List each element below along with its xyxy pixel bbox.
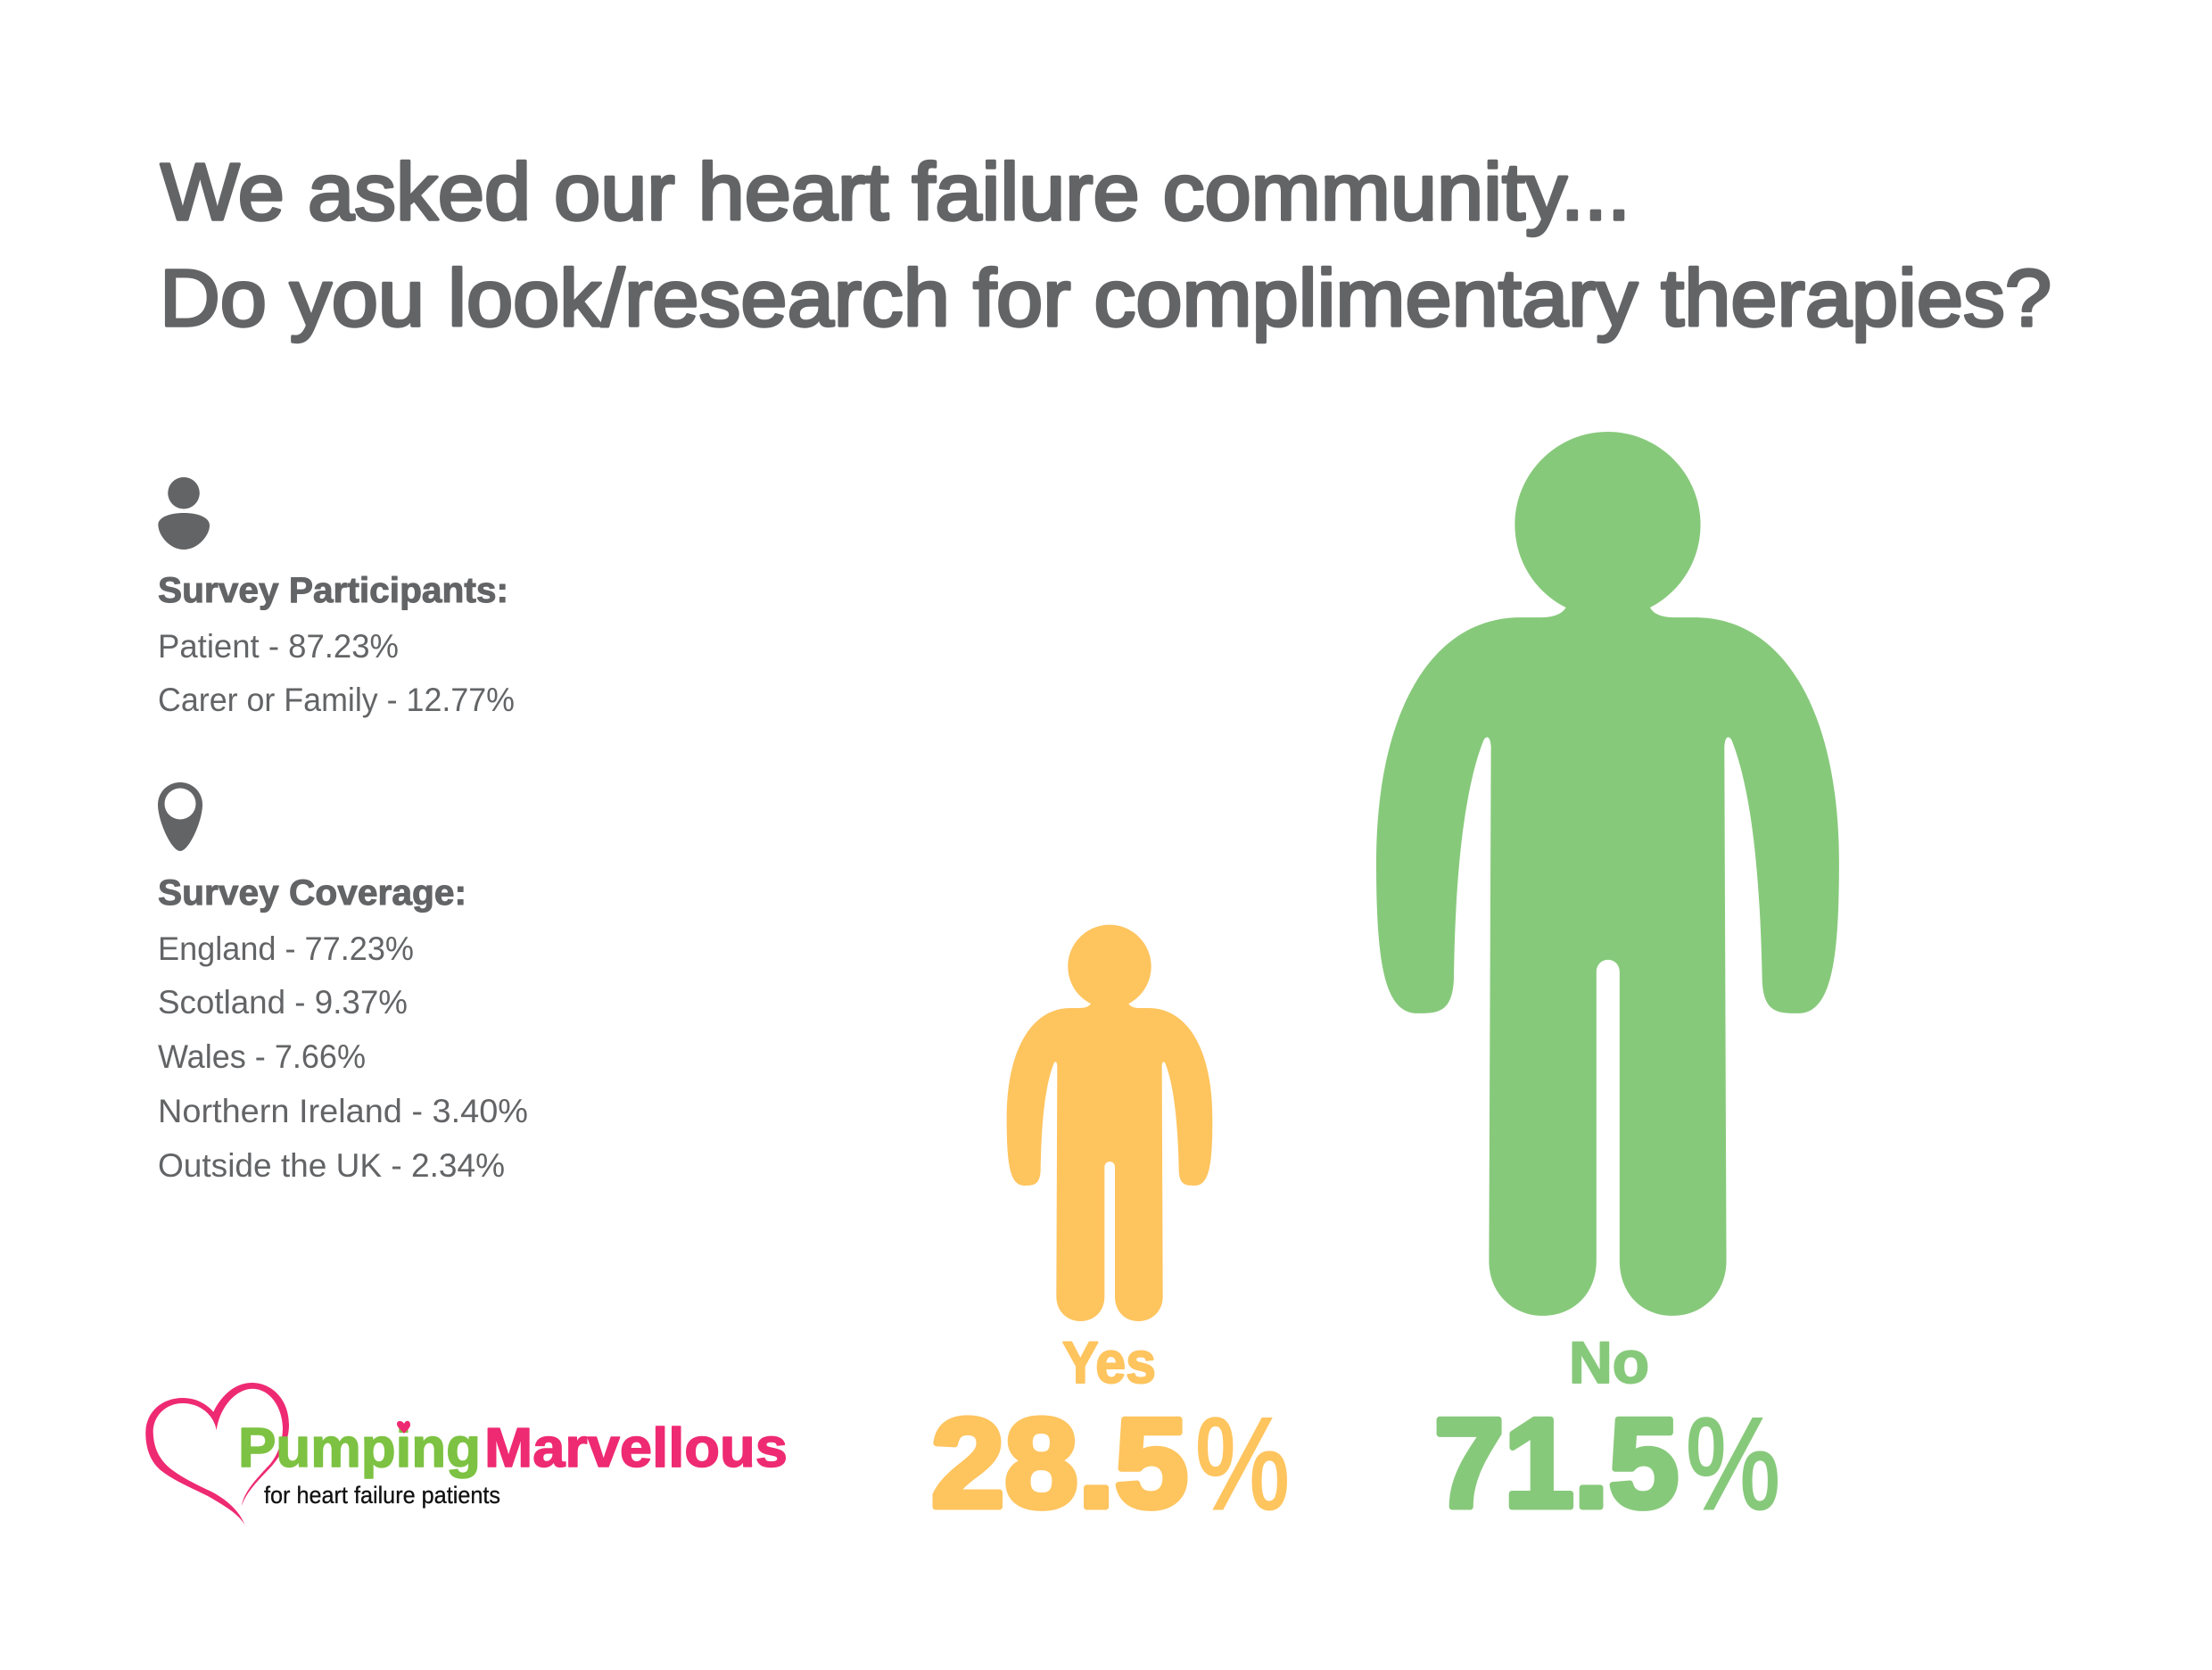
icon: location pin: [158, 782, 202, 851]
label: no: No: [1569, 1329, 1649, 1395]
icon: heart outline: [145, 1383, 289, 1525]
text: Northern Ireland: Northern Ireland - 3.40%: [158, 1093, 528, 1129]
text: patient share: Patient - 87.23%: [158, 628, 399, 665]
panel: survey participants: [158, 571, 515, 718]
text: carer share: Carer or Family - 12.77%: [158, 682, 515, 718]
text: Outside the UK: Outside the UK - 2.34%: [158, 1147, 505, 1184]
title: Do you look/research for complimentary therapies?: [160, 254, 2051, 343]
text: England: England - 77.23%: [158, 930, 414, 967]
figure: no person: [1376, 432, 1839, 1316]
value: 71.5%: 71.5: [1434, 1393, 1679, 1534]
icon: person: [158, 477, 210, 550]
value: 28.5%: %: [1195, 1391, 1290, 1536]
value: 71.5%: %: [1686, 1391, 1780, 1536]
title: [160, 148, 2051, 343]
title: We asked our heart failure community...: [161, 148, 1630, 237]
value: 28.5%: 28.5: [931, 1393, 1188, 1534]
text: Pumping: Pumping: [238, 1418, 481, 1479]
value: 71.5%: [1434, 1391, 1780, 1536]
text: Marvellous: Marvellous: [484, 1418, 788, 1479]
text: Scotland: Scotland - 9.37%: [158, 984, 408, 1021]
text: tagline: for heart failure patients: [264, 1482, 500, 1509]
heading: survey participants: Survey Participants:: [158, 571, 508, 610]
heading: survey coverage: Survey Coverage:: [158, 873, 466, 913]
value: 28.5%: [931, 1391, 1290, 1536]
icon: small heart: [397, 1421, 410, 1434]
figure: yes person: [1007, 925, 1212, 1321]
panel: survey coverage: [158, 873, 528, 1184]
logo: Pumping Marvellous: [145, 1383, 788, 1525]
text: Wales: Wales - 7.66%: [158, 1038, 366, 1075]
label: yes: Yes: [1062, 1329, 1156, 1395]
